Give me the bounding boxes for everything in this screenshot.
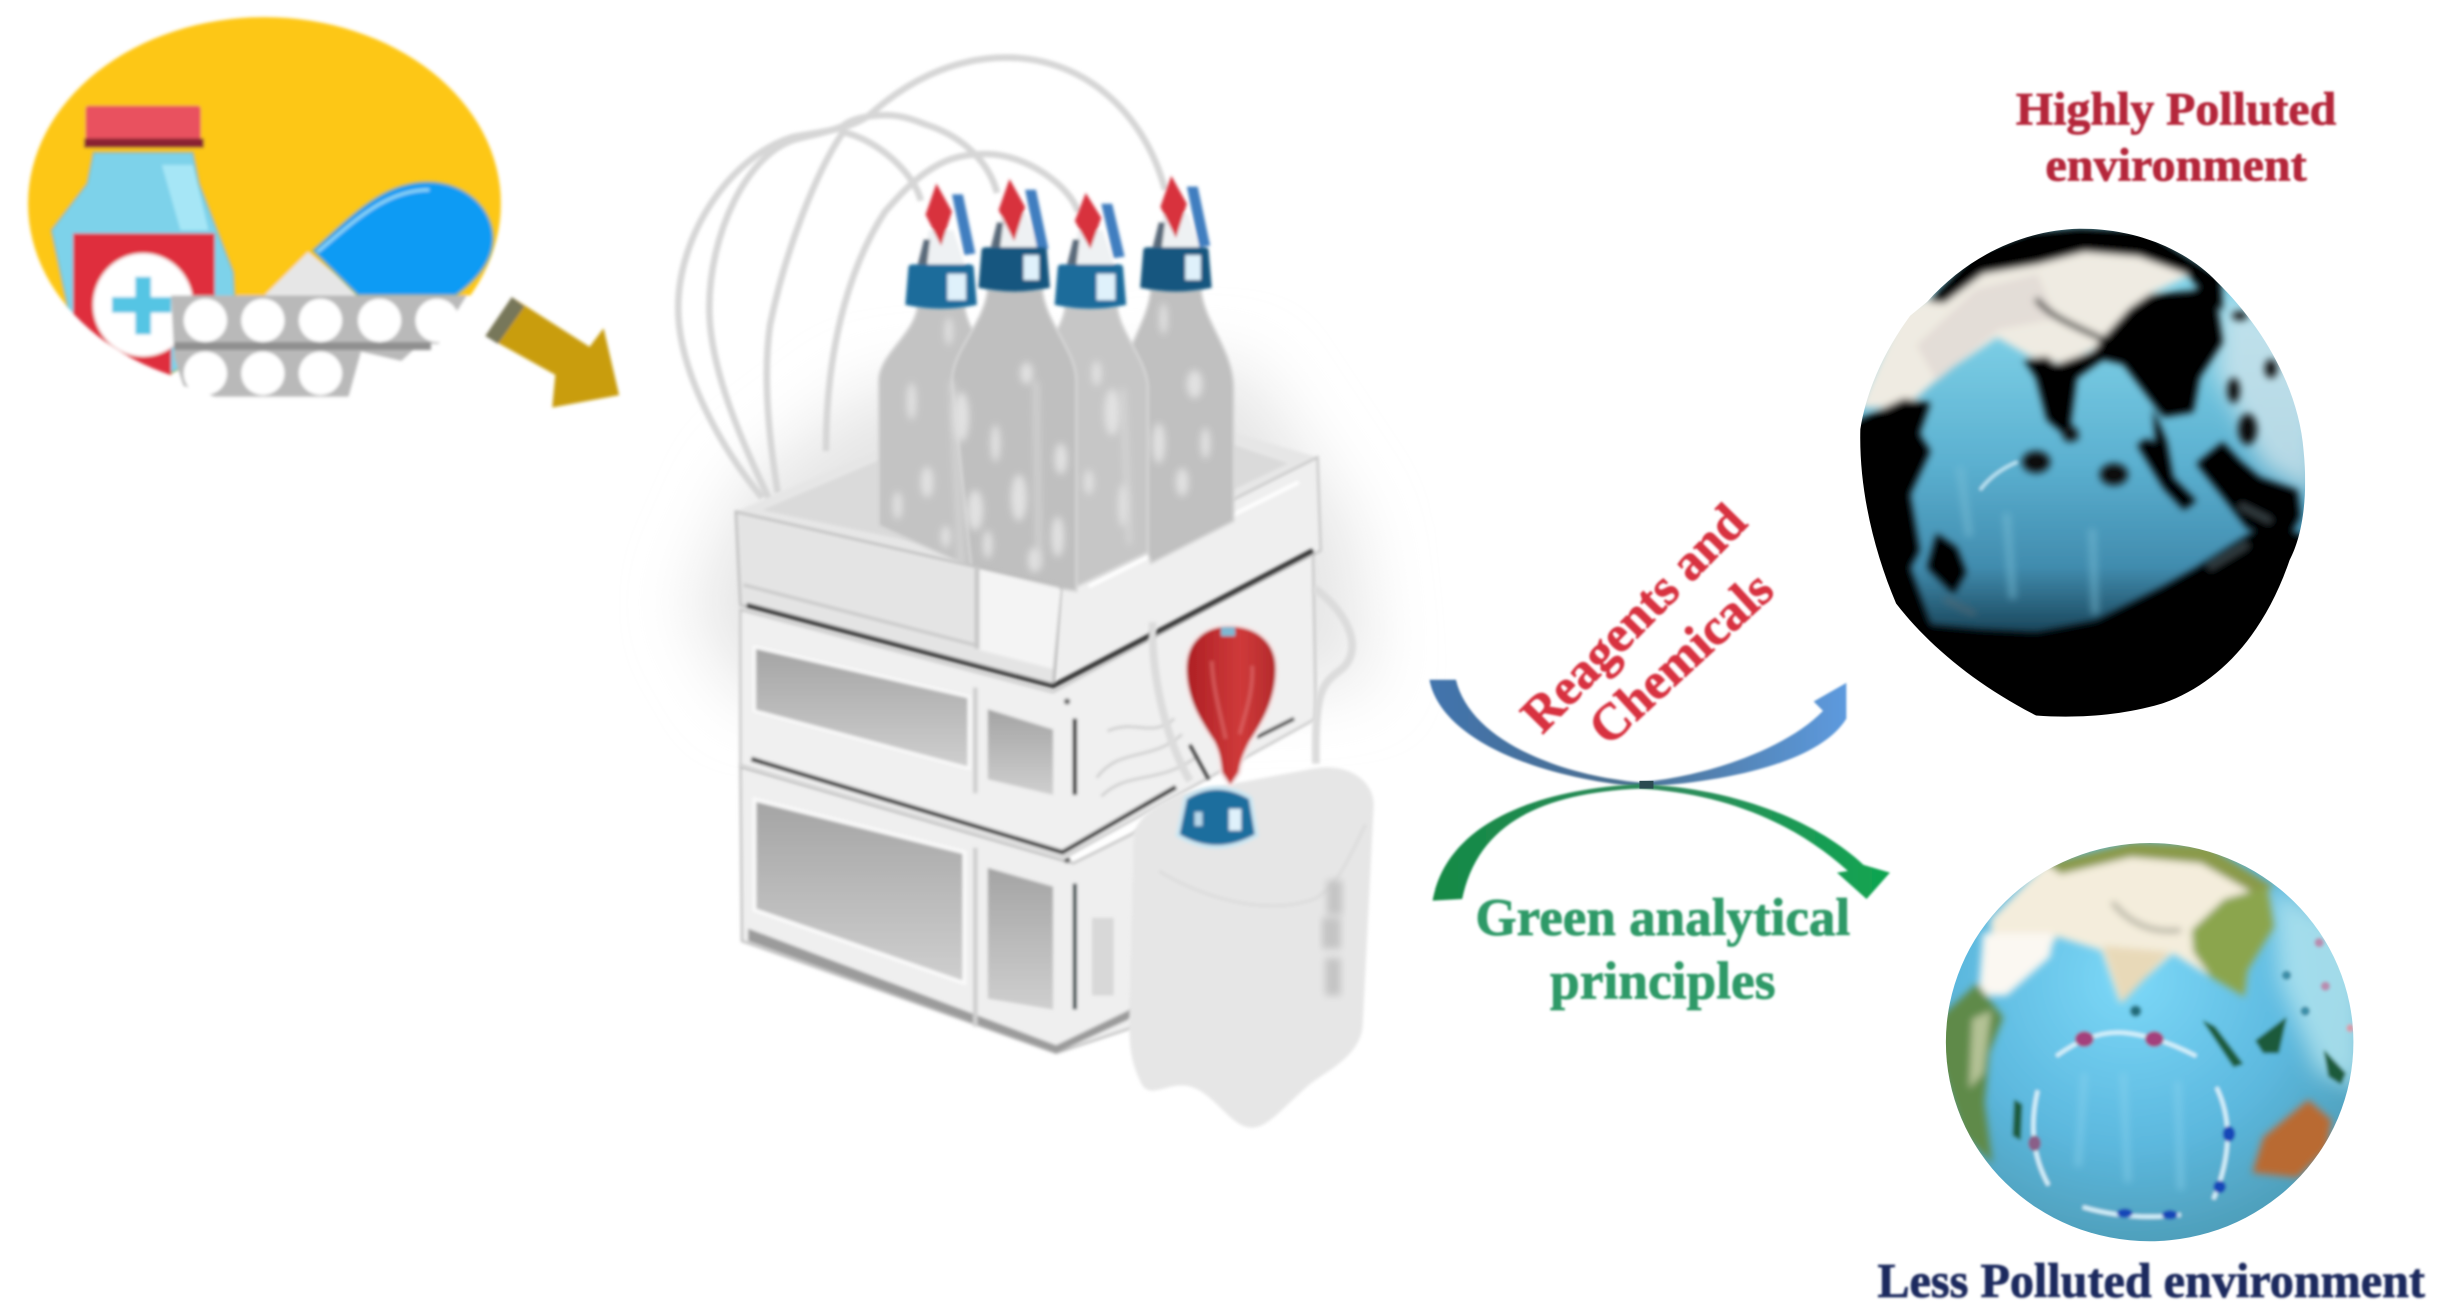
- land details: [1937, 841, 2332, 1177]
- valve 2: [978, 179, 1050, 292]
- arrow junction mark: [1639, 781, 1653, 789]
- waste container: [1129, 767, 1374, 1128]
- illustration: HPLC instrument: [678, 58, 1374, 1128]
- label: less polluted environment: Less Polluted environment: [1877, 1255, 2425, 1308]
- label: green analytical principles: Green analytical: [1475, 889, 1850, 947]
- northern green rim: [2045, 841, 2274, 894]
- icon: bottle cap: [84, 106, 204, 148]
- label: highly polluted environment: Highly Polluted: [2016, 83, 2336, 135]
- icon: yellow circle background: [25, 14, 504, 306]
- South-East Asia green: [2192, 887, 2274, 997]
- lower module: [740, 767, 1182, 1053]
- Arabia and north Africa white: [1979, 933, 2053, 995]
- black northern band: [1927, 227, 2223, 311]
- arrow: reagents and chemicals to polluted globe: [1429, 680, 1846, 787]
- red waste bulb: [1185, 625, 1277, 787]
- black Madagascar: [1927, 534, 1966, 594]
- waste tubing behind jug: [1153, 588, 1352, 781]
- white dashed route: [2033, 1032, 2227, 1217]
- bottle 2: [952, 289, 1076, 591]
- grey smudges on dark land: [1944, 506, 2271, 614]
- label: green analytical principles: principles: [1550, 953, 1776, 1011]
- Africa cream highlight: [1969, 1011, 1991, 1089]
- ocean streaks: [2078, 1073, 2181, 1190]
- route markers: [2028, 938, 2354, 1219]
- dark green islands: [2013, 1006, 2346, 1140]
- Australia: [2252, 1100, 2332, 1177]
- polluted ocean: [1861, 228, 2306, 640]
- middle module: [740, 551, 1316, 859]
- valve 3: [1055, 193, 1126, 309]
- label: reagents and chemicals: Chemicals: [1578, 560, 1785, 756]
- black Africa and southern land: [1860, 394, 2300, 657]
- solvent bottles: [879, 289, 1233, 591]
- bottle 4: [1123, 289, 1233, 563]
- bottle 1: [879, 306, 996, 579]
- Africa green: [1937, 983, 2003, 1163]
- land details: [1860, 228, 2304, 657]
- tray front panel: [736, 512, 1313, 686]
- arrow: green analytical principles to clean globe: [1433, 784, 1890, 901]
- icon: pharmaceutical products: [0, 0, 501, 397]
- bottle 3: [1034, 306, 1148, 588]
- solvent tray: [736, 432, 1321, 686]
- icon: medical plus badge: [93, 254, 193, 356]
- valve 4: [1140, 176, 1212, 292]
- Himalaya line: [2112, 902, 2181, 931]
- valve 1: [905, 184, 977, 309]
- icon: blister pack: [171, 296, 467, 397]
- pale cloud shading: [1920, 276, 2050, 376]
- arrow: sample to instrument: [485, 297, 619, 408]
- icon: medicine bottle: [51, 152, 236, 397]
- blue waste cap: [1178, 788, 1257, 847]
- pale Pacific haze: [2217, 296, 2318, 498]
- clean ocean: [1937, 832, 2364, 1252]
- Himalaya line: [2036, 299, 2106, 341]
- label: green analytical principles: [1475, 889, 1850, 1011]
- bottle separators: [952, 381, 1129, 568]
- globe: less polluted earth: [1937, 832, 2364, 1252]
- Asia land: [1991, 845, 2274, 1003]
- black islands: [2022, 311, 2277, 485]
- pollution cloud over land: [1859, 241, 2196, 408]
- black Borneo and Pacific land: [2196, 442, 2301, 537]
- solvent tubing: [678, 58, 1165, 501]
- bottle mottling: [893, 303, 1210, 572]
- bottle valve heads: [905, 176, 1212, 309]
- light shipping dash: [1980, 462, 2017, 490]
- label: highly polluted environment: environment: [2045, 139, 2307, 191]
- black Asia: [2024, 282, 2223, 440]
- pale Pacific: [2271, 887, 2364, 1089]
- haze behind instrument: [692, 366, 1369, 700]
- India tan: [2103, 946, 2170, 1003]
- label: reagents and chemicals: Reagents and: [1510, 493, 1758, 744]
- icon: capsule: [264, 182, 493, 296]
- black South-East Asia: [2137, 408, 2196, 510]
- globe: highly polluted earth: [1851, 218, 2318, 731]
- label: highly polluted environment: [2016, 83, 2336, 191]
- ocean streaks: [1960, 467, 2095, 614]
